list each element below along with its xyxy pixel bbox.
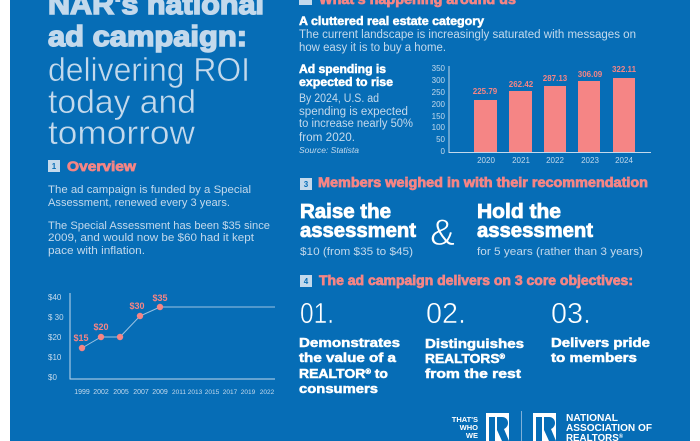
divider — [521, 411, 522, 441]
logo: That's who we R: WHO — [460, 423, 478, 432]
line chart: special assessment: 2009 — [152, 389, 168, 396]
line chart: special assessment: $10 — [48, 353, 62, 362]
line chart: special assessment: 2022 — [260, 389, 275, 396]
line chart: special assessment: 2019 — [241, 389, 256, 396]
objective 03 — [551, 298, 650, 365]
line chart: special assessment: 2013 — [188, 389, 203, 396]
bar chart: ad spending: 262.42 — [509, 80, 534, 89]
text block: cluttered category: The current landscape is increasingly saturated with messages on — [299, 29, 636, 41]
objective 01 — [299, 298, 400, 396]
ampersand: & — [430, 212, 455, 253]
text block: overview body: pace with inflation. — [48, 245, 145, 257]
recommendation: raise the assessment: $10 (from $35 to $45) — [300, 246, 413, 258]
line chart: special assessment: $30 — [129, 301, 145, 311]
line chart: special assessment: $ 30 — [48, 313, 64, 322]
objective 02: 02. — [426, 298, 466, 330]
heading: 1 Overview — [48, 159, 137, 174]
title: ad campaign: — [48, 21, 247, 53]
heading: 1 Overview: Overview — [67, 159, 137, 174]
recommendation: raise the assessment — [300, 201, 416, 258]
logo: That's who we R: WE — [466, 431, 478, 440]
logo: National Association of Realtors: ® — [619, 433, 624, 440]
recommendation: raise the assessment: Raise the — [300, 201, 391, 223]
bar chart: ad spending: 200 — [432, 100, 446, 109]
heading: 3 Members weighed in: 3 — [304, 180, 309, 189]
bar chart: ad spending: 322.11 — [612, 65, 637, 74]
objective 01: to — [371, 366, 388, 381]
title: tomorrow — [48, 114, 195, 151]
recommendation: hold the assessment: assessment — [477, 220, 593, 242]
objective 01: the value of a — [299, 350, 397, 365]
logo: That's who we R — [452, 413, 509, 441]
text block: ad spending: Source: Statista — [299, 146, 360, 155]
title: delivering ROI — [48, 51, 250, 88]
line chart: special assessment: 2007 — [133, 389, 149, 396]
line chart: special assessment: 1999 — [74, 389, 90, 396]
text block: overview body: 2009, and would now be $60 had it kept — [48, 232, 254, 244]
objective 03: to members — [551, 350, 637, 365]
recommendation: hold the assessment: for 5 years (rather than 3 years) — [477, 246, 643, 258]
line chart: special assessment — [48, 293, 275, 396]
bar chart: ad spending: 250 — [432, 88, 446, 97]
heading: 4 core objectives: The ad campaign delivers on 3 core objectives: — [319, 273, 633, 288]
bar chart: ad spending: 287.13 — [543, 74, 568, 83]
objective 02: Distinguishes — [425, 336, 524, 351]
title — [48, 0, 264, 151]
bar chart: ad spending: 2024 — [615, 156, 633, 165]
line chart: special assessment: $0 — [48, 373, 57, 382]
logo: National Association of Realtors: ASSOCIATION OF — [566, 423, 652, 434]
bar chart: ad spending: 2020 — [477, 156, 495, 165]
line chart: special assessment: 2005 — [113, 389, 129, 396]
text block: ad spending: to increase nearly 50% — [299, 118, 413, 130]
bar chart: ad spending: 225.79 — [473, 87, 498, 96]
objective 03: 03. — [551, 298, 591, 330]
line chart: special assessment: 2002 — [93, 389, 109, 396]
heading: 4 core objectives: 4 — [304, 277, 309, 286]
objective 01: ® — [365, 368, 372, 376]
text block: ad spending: Ad spending is — [299, 64, 386, 76]
bar chart: ad spending: 2023 — [581, 156, 599, 165]
recommendation: hold the assessment — [477, 201, 643, 258]
line chart: special assessment: 2017 — [223, 389, 238, 396]
line chart: special assessment: $35 — [152, 293, 168, 303]
bar chart: ad spending: 2021 — [512, 156, 530, 165]
line chart: special assessment: $15 — [73, 333, 89, 343]
objective 01: REALTOR — [299, 366, 361, 381]
bar chart: ad spending: 50 — [436, 135, 446, 144]
line chart: special assessment: 2011 — [172, 389, 186, 396]
text block: cluttered category: how easy it is to buy a home. — [299, 42, 446, 54]
line chart: special assessment: $20 — [93, 322, 109, 332]
line chart: special assessment: $40 — [48, 293, 62, 302]
objective 01: consumers — [299, 381, 378, 396]
text block: ad spending: from 2020. — [299, 132, 355, 144]
text block: overview body: Assessment, renewed every 3 years. — [48, 197, 230, 209]
text block: cluttered category: A cluttered real estate category — [299, 16, 485, 28]
bar chart: ad spending: 2022 — [546, 156, 564, 165]
bar chart: ad spending — [432, 64, 651, 165]
objective 02: ® — [500, 353, 506, 361]
bar chart: ad spending: 350 — [432, 64, 446, 73]
text block: ad spending: spending is expected — [299, 106, 408, 118]
objective 02: REALTORS — [425, 351, 495, 366]
text block: ad spending — [299, 64, 413, 155]
recommendation: raise the assessment: assessment — [300, 220, 416, 242]
heading: 1 Overview: 1 — [52, 162, 57, 171]
line chart: special assessment: $20 — [48, 333, 62, 342]
objective 01: Demonstrates — [299, 335, 400, 350]
bar chart: ad spending: 150 — [432, 112, 446, 121]
bar chart: ad spending: 306.09 — [578, 70, 603, 79]
bar chart: ad spending: 0 — [441, 147, 446, 156]
bar chart: ad spending: 300 — [432, 76, 446, 85]
bar chart: ad spending: 100 — [432, 123, 446, 132]
title: today and — [48, 83, 196, 120]
logo: National Association of Realtors: NATIONAL — [566, 413, 618, 424]
heading: 3 Members weighed in: Members weighed in with their recommendation — [318, 175, 648, 190]
logo: National Association of Realtors — [533, 413, 652, 441]
objective 02 — [425, 298, 524, 381]
text block: cluttered category — [299, 16, 636, 54]
objective 03: Delivers pride — [551, 335, 650, 350]
text block: overview body: The Special Assessment has been $35 since — [48, 220, 270, 232]
recommendation: hold the assessment: Hold the — [477, 201, 561, 223]
line chart: special assessment: 2015 — [205, 389, 220, 396]
objective 02: from the rest — [425, 366, 522, 381]
text block: ad spending: By 2024, U.S. ad — [299, 93, 379, 105]
logo: That's who we R: THAT'S — [452, 415, 478, 424]
text block: overview body: The ad campaign is funded by a Special — [48, 184, 251, 196]
text block: overview body — [48, 184, 270, 257]
objective 01: 01. — [300, 298, 334, 330]
text block: ad spending: expected to rise — [299, 77, 393, 89]
